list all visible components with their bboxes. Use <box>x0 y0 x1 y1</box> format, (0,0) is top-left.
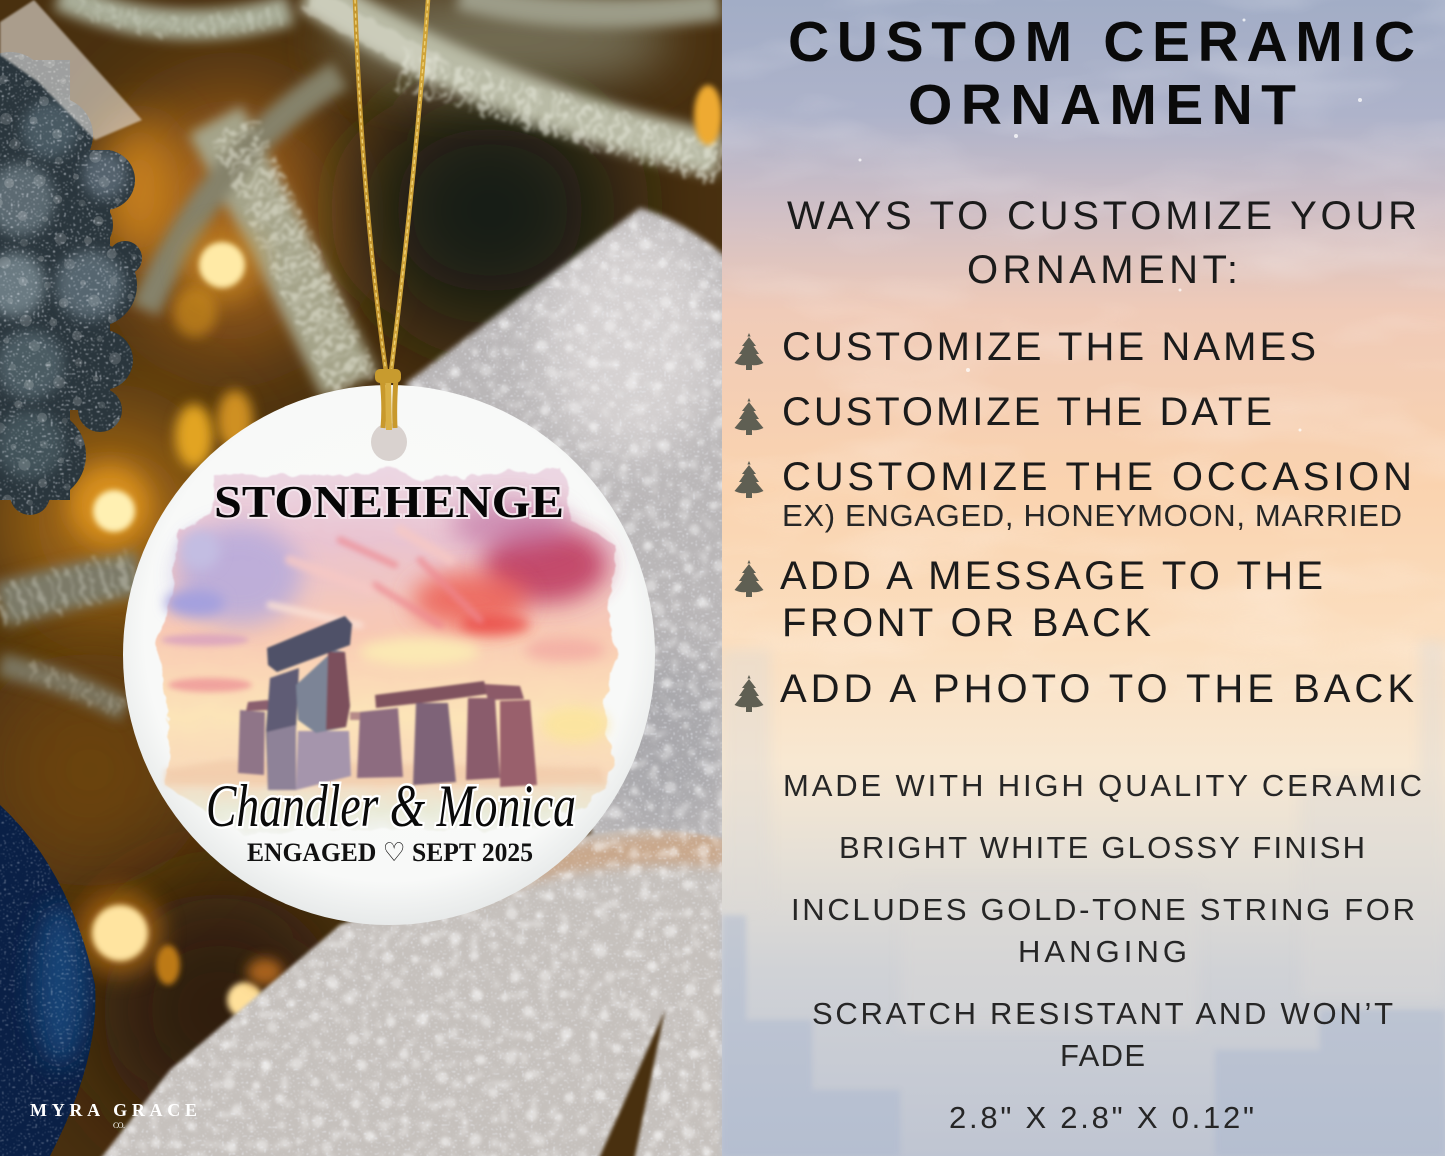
item: message: ADD A MESSAGE TO THE <box>780 554 1323 598</box>
background bokeh <box>0 0 670 1130</box>
names: Chandler & Monica <box>206 773 576 839</box>
subheading: WAYS TO CUSTOMIZE YOUR <box>787 194 1417 238</box>
item: occasion <box>782 455 1412 533</box>
icon: tree <box>734 675 764 712</box>
icon: warm light beside ornaments <box>93 490 135 532</box>
product features: 2.8" X 2.8" X 0.12" <box>949 1100 1254 1135</box>
icon: tree <box>734 560 764 597</box>
heading <box>788 10 1415 137</box>
glitter ribbon lower <box>99 828 722 1156</box>
product features: SCRATCH RESISTANT AND WON’T <box>812 996 1393 1031</box>
item: photo: ADD A PHOTO TO THE BACK <box>780 667 1414 711</box>
ornament <box>123 369 655 925</box>
product features <box>783 768 1422 1135</box>
top frosted foliage <box>60 0 720 385</box>
subheading <box>787 194 1417 292</box>
item: occasion: CUSTOMIZE THE OCCASION <box>782 455 1412 499</box>
item: date: CUSTOMIZE THE DATE <box>782 390 1272 434</box>
product features: FADE <box>1060 1038 1145 1073</box>
lower left frosted branch <box>0 570 140 710</box>
gold knot <box>375 369 401 430</box>
icon: tree <box>734 461 764 498</box>
watercolor sunset scene <box>158 468 619 832</box>
list: customization options <box>734 325 1414 712</box>
item: names: CUSTOMIZE THE NAMES <box>782 325 1316 369</box>
icon: gold light glow <box>70 85 722 1018</box>
sheer white bow <box>0 0 142 140</box>
snow specks <box>858 18 1362 432</box>
item: message <box>780 554 1323 645</box>
glitter ribbon upper <box>402 204 722 842</box>
heading: CUSTOM CERAMIC <box>788 10 1415 74</box>
product features: HANGING <box>1018 934 1187 969</box>
blue glitter ornament <box>0 800 100 1156</box>
panel: details background <box>722 0 1445 1156</box>
date line: ENGAGED ♡ SEPT 2025 <box>247 838 533 867</box>
icon: tree <box>734 333 764 370</box>
item: message: FRONT OR BACK <box>782 601 1151 645</box>
faint city skyline <box>722 915 1445 1156</box>
heading: ORNAMENT <box>908 73 1296 137</box>
product features: MADE WITH HIGH QUALITY CERAMIC <box>783 768 1422 803</box>
gold string <box>355 0 428 372</box>
stonehenge stones <box>238 616 537 790</box>
watermark: MYRA GRACE <box>30 1100 197 1120</box>
product features: INCLUDES GOLD-TONE STRING FOR <box>791 892 1415 927</box>
dark glitter ornaments <box>0 50 145 520</box>
title: STONEHENGE: STONEHENGE <box>214 476 564 527</box>
watermark: CO. <box>113 1121 125 1130</box>
item: occasion: EX) ENGAGED, HONEYMOON, MARRIED <box>782 498 1402 533</box>
ornament hole <box>371 423 407 461</box>
watermark <box>30 1100 197 1130</box>
product features: BRIGHT WHITE GLOSSY FINISH <box>839 830 1365 865</box>
panel: product photo <box>0 0 760 1156</box>
subheading: ORNAMENT: <box>967 248 1238 292</box>
icon: tree <box>734 398 764 435</box>
